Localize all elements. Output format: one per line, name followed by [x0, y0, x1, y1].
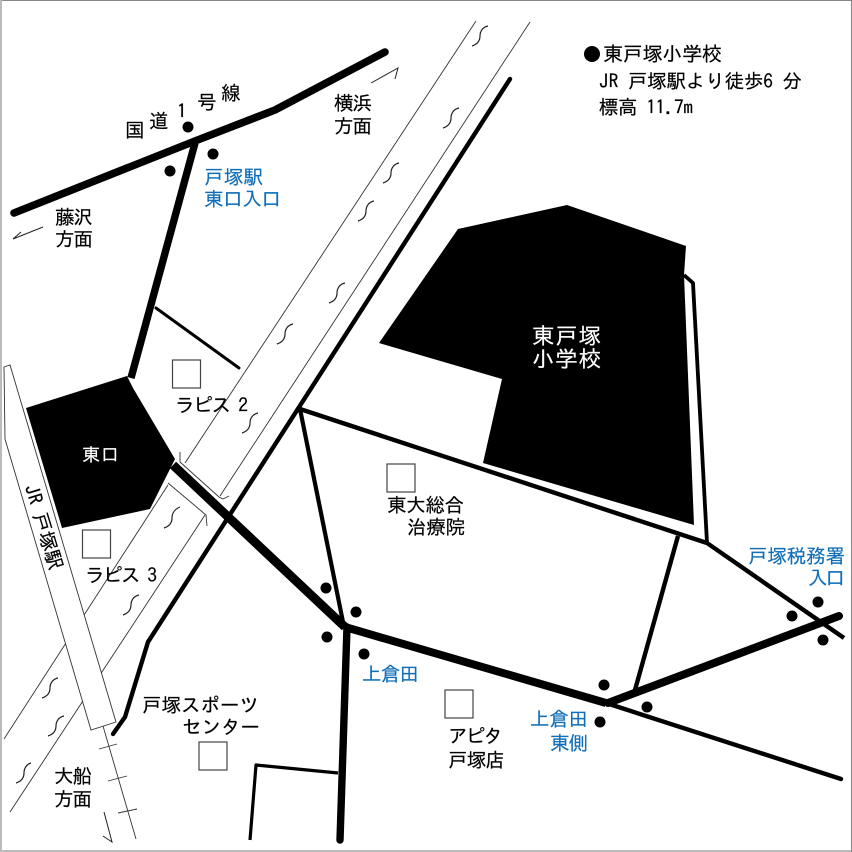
label: Todai general clinic: 東大総合: [387, 495, 464, 515]
label: school: [532, 324, 601, 370]
label: Totsuka east exit entrance stop: [204, 168, 281, 209]
label: school: 東戸塚: [532, 324, 601, 347]
road name: route 1: 1: [177, 102, 187, 121]
label: Totsuka sports center: [142, 695, 260, 737]
label: Ofuna direction: 方面: [54, 790, 92, 809]
label: Ofuna direction: 大船: [54, 766, 92, 786]
road name: route 1: 号: [197, 93, 216, 112]
label: Yokohama direction: [334, 93, 372, 136]
label: Totsuka sports center: 戸塚スポーツ: [142, 695, 259, 715]
bus stop dots: [164, 122, 828, 728]
label: Todai general clinic: 治療院: [407, 517, 465, 537]
label: Kamikurata east stop: 東側: [550, 733, 588, 753]
school block: [379, 205, 694, 525]
label: Apita Totsuka: [448, 727, 505, 770]
label: Todai general clinic: [387, 495, 465, 537]
river: [4, 21, 530, 812]
label: JR Totsuka station: JR 戸塚駅: [21, 482, 65, 572]
label: Ofuna direction: [54, 766, 92, 809]
road name: route 1: 道: [149, 112, 168, 131]
legend: JR 戸塚駅より徒歩6 分: [599, 71, 802, 91]
east exit block: [26, 376, 175, 528]
label: Fujisawa direction: 方面: [55, 230, 93, 249]
label: east exit: 東口: [82, 445, 119, 464]
label: Kamikurata stop: 上倉田: [362, 664, 419, 684]
label: Apita Totsuka: アピタ: [448, 727, 503, 746]
building squares: [82, 360, 473, 770]
railway: JR Totsuka station strip: [4, 365, 137, 839]
road name: route 1: 線: [221, 83, 240, 103]
label: Apita Totsuka: 戸塚店: [448, 750, 505, 770]
label: Lapis 2: ラピス 2: [175, 396, 248, 415]
label: Lapis 3: ラピス 3: [85, 566, 157, 585]
label: Totsuka tax office entrance stop: 入口: [808, 569, 845, 588]
label: Kamikurata east stop: [530, 709, 588, 753]
road name: route 1: [125, 83, 240, 140]
label: Totsuka sports center: センター: [182, 718, 260, 737]
legend: 標高 11.7m: [599, 97, 693, 117]
label: Yokohama direction: 方面: [334, 117, 372, 136]
label: Kamikurata east stop: 上倉田: [530, 709, 588, 729]
legend: [584, 44, 802, 117]
label: Totsuka tax office entrance stop: 戸塚税務署: [748, 546, 845, 566]
label: Fujisawa direction: [55, 207, 93, 249]
label: Totsuka tax office entrance stop: [748, 546, 845, 588]
label: school: 小学校: [532, 347, 601, 370]
legend: 東戸塚小学校: [603, 44, 722, 64]
road name: route 1: 国: [125, 121, 144, 140]
label: Yokohama direction: 横浜: [334, 93, 372, 113]
direction arrows: [13, 68, 398, 842]
label: Totsuka east exit entrance stop: 戸塚駅: [204, 168, 263, 187]
label: Totsuka east exit entrance stop: 東口入口: [204, 189, 281, 209]
label: Fujisawa direction: 藤沢: [55, 207, 93, 227]
